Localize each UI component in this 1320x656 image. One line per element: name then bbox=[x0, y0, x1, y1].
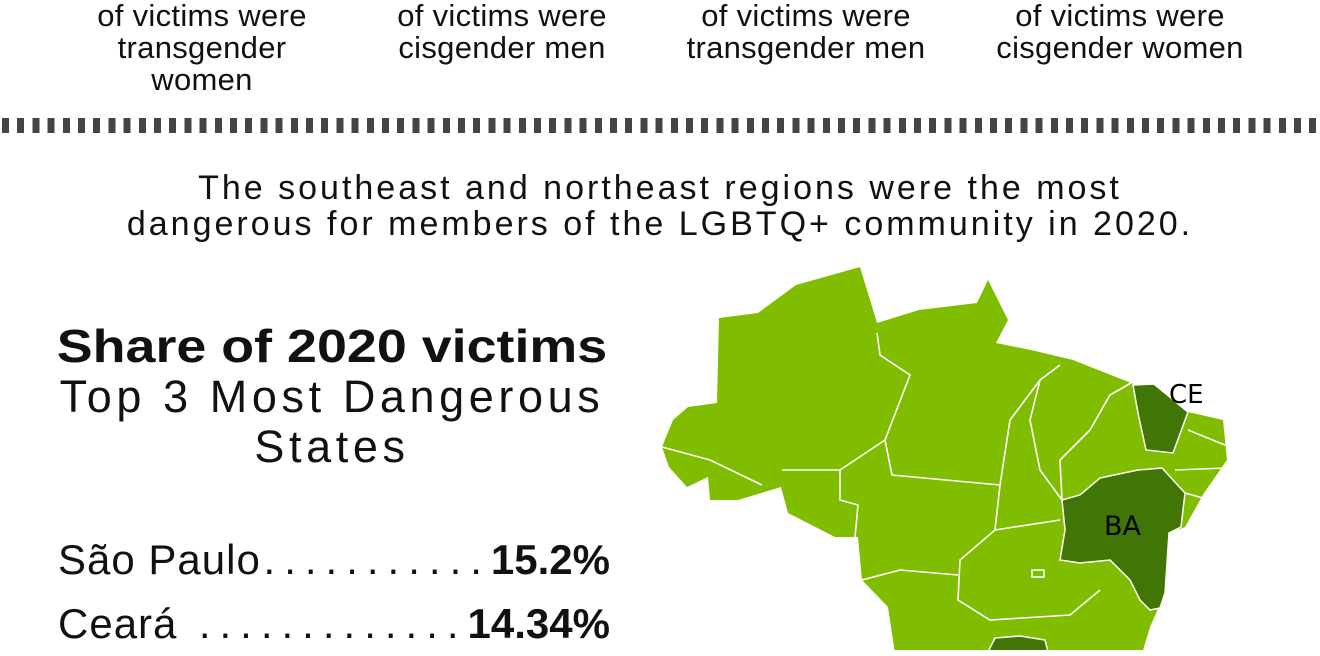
state: SP bbox=[988, 636, 1048, 652]
caption: transgender women bbox=[97, 0, 307, 97]
caption: transgender women: women bbox=[151, 62, 253, 97]
row: São Paulo bbox=[58, 536, 610, 583]
row: Ceará: Ceará bbox=[58, 600, 177, 647]
caption: transgender women: transgender bbox=[118, 30, 286, 65]
heading: share of 2020 victims: Top 3 Most Dangerous bbox=[60, 371, 604, 422]
row: Ceará bbox=[58, 600, 610, 647]
label: BA: BA bbox=[1104, 511, 1142, 542]
intro sentence: The southeast and northeast regions were the most bbox=[198, 169, 1122, 207]
heading: share of 2020 victims bbox=[57, 320, 607, 472]
caption: cisgender men bbox=[397, 0, 607, 65]
caption: transgender men bbox=[687, 0, 925, 65]
caption: cisgender men: cisgender men bbox=[398, 30, 606, 65]
caption: transgender men: transgender men bbox=[687, 30, 925, 65]
heading: share of 2020 victims: Share of 2020 victims bbox=[57, 320, 607, 372]
caption: cisgender women: cisgender women bbox=[996, 30, 1244, 65]
row: Ceará: 14.34% bbox=[468, 600, 610, 647]
list: top states bbox=[58, 536, 610, 647]
state: BA bbox=[1060, 468, 1185, 610]
intro sentence bbox=[127, 169, 1193, 243]
state: CE bbox=[1133, 384, 1188, 453]
intro sentence: dangerous for members of the LGBTQ+ community in 2020. bbox=[127, 205, 1193, 243]
label: CE: CE bbox=[1169, 380, 1204, 410]
row: São Paulo: São Paulo bbox=[58, 536, 261, 583]
row: São Paulo: 15.2% bbox=[491, 536, 610, 583]
caption: cisgender women bbox=[996, 0, 1244, 65]
heading: share of 2020 victims: States bbox=[254, 421, 410, 472]
